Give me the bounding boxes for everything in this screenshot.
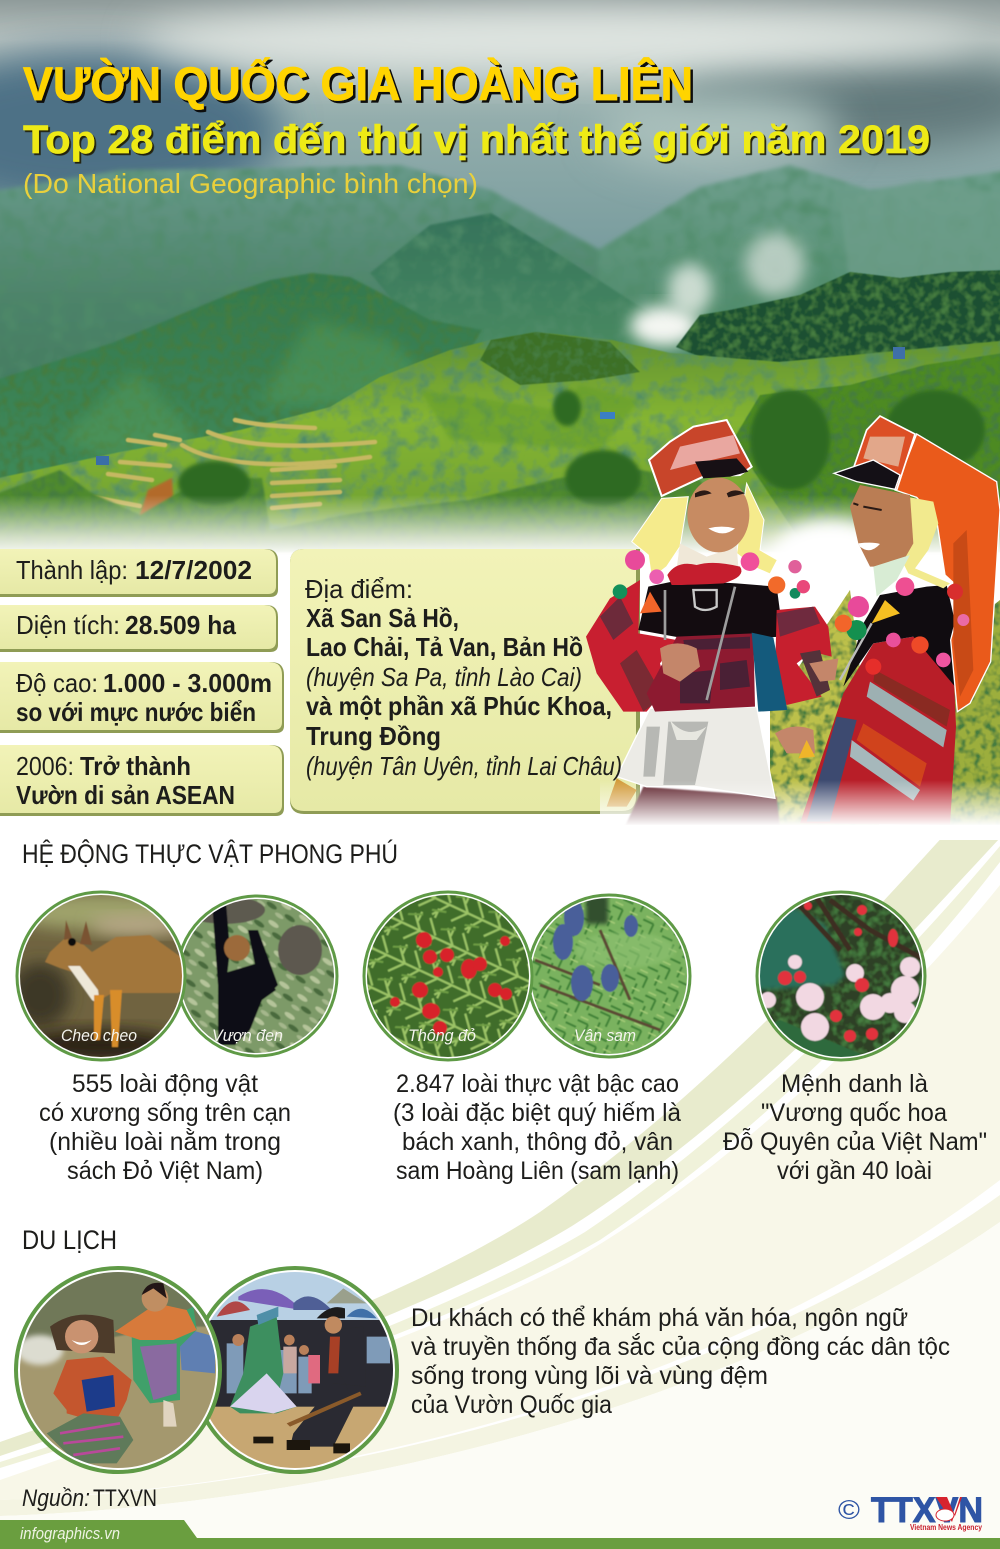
caption: rhododendron kingdom: Đỗ Quyên của Việt Nam"	[723, 1127, 987, 1156]
caption: animals: sách Đỏ Việt Nam)	[67, 1157, 263, 1185]
blue panel	[752, 633, 787, 712]
left sleeve	[586, 580, 677, 712]
tourism description: Du khách có thể khám phá văn hóa, ngôn ngữ	[411, 1304, 908, 1332]
bottom fade	[0, 495, 1000, 556]
left tree mass	[0, 470, 740, 552]
hero landscape photo	[0, 0, 1000, 556]
caption: rhododendron kingdom: với gần 40 loài	[777, 1157, 932, 1185]
caption: rhododendron kingdom	[723, 1070, 987, 1185]
tree clumps	[178, 390, 985, 506]
black blouse	[843, 585, 958, 687]
source	[22, 1485, 157, 1512]
TTXVN logo: Vietnam News Agency	[910, 1523, 982, 1532]
headdress	[649, 420, 752, 496]
info box: area: Diện tích:	[16, 610, 120, 640]
silver chain	[840, 623, 872, 680]
hood	[632, 483, 777, 578]
location text: (huyện Sa Pa, tỉnh Lào Cai)	[306, 662, 582, 692]
photo circle: gibbon: Vượn đen	[212, 1026, 283, 1045]
website: infographics.vn	[20, 1524, 120, 1543]
photo circle: gibbon	[181, 894, 338, 1058]
tassels	[607, 550, 810, 807]
face	[687, 478, 749, 552]
headdress	[854, 416, 915, 490]
photo circle: festival crowd	[190, 1268, 400, 1477]
source: Nguồn:	[22, 1485, 90, 1512]
caption: animals	[39, 1070, 291, 1185]
silver necklace	[693, 590, 717, 610]
silver pendants	[643, 722, 708, 785]
caption: plants	[393, 1070, 681, 1185]
photo circle: rhododendron	[756, 890, 928, 1062]
photo circle: fir cones	[530, 894, 692, 1058]
woman on the left	[586, 420, 838, 830]
location text: Xã San Sả Hồ,	[306, 603, 459, 633]
skirt and jacket	[800, 637, 956, 825]
background behind the two women	[640, 520, 1000, 840]
tourism description: của Vườn Quốc gia	[411, 1391, 612, 1419]
info box: location background	[290, 549, 640, 814]
white fade under the women	[600, 780, 1000, 837]
skirt	[623, 787, 780, 830]
photo circle: red yew	[362, 890, 534, 1062]
two women in ethnic costume	[586, 416, 1000, 830]
caption: animals: 555 loài động vật	[72, 1070, 258, 1098]
location text: Địa điểm:	[305, 574, 413, 604]
caption: plants: sam Hoàng Liên (sam lạnh)	[396, 1157, 679, 1185]
sky and clouds	[0, 0, 1000, 400]
caption: animals: có xương sống trên cạn	[39, 1099, 291, 1127]
white apron	[617, 707, 775, 798]
tourism description: và truyền thống đa sắc của cộng đồng các dân tộc	[411, 1332, 950, 1361]
info box: founding date: Thành lập:	[16, 555, 128, 585]
info box: ASEAN heritage: Vườn di sản ASEAN	[16, 780, 235, 810]
source of ranking: (Do National Geographic bình chọn)	[23, 168, 478, 199]
photo circle: mouse deer: Cheo cheo	[61, 1026, 137, 1045]
TTXVN logo: TTXVN	[871, 1491, 983, 1530]
info box: founding date: 12/7/2002	[135, 555, 252, 585]
info box: altitude: 1.000 - 3.000m	[103, 668, 272, 698]
caption: rhododendron kingdom: Mệnh danh là	[781, 1070, 928, 1098]
collar	[873, 555, 910, 597]
right sleeve	[775, 607, 832, 705]
info box: area	[0, 605, 278, 652]
right pine forest	[676, 270, 1000, 365]
caption: plants: bách xanh, thông đỏ, vân	[402, 1128, 673, 1156]
title: VƯỜN QUỐC GIA HOÀNG LIÊN	[23, 57, 693, 110]
tourism description	[411, 1304, 950, 1419]
TTXVN logo: ©	[838, 1495, 860, 1525]
photo circle: mouse deer	[10, 890, 190, 1062]
woman on the right	[775, 416, 1000, 825]
heading: tourism: DU LỊCH	[22, 1225, 117, 1255]
photo circle: fir cones: Vân sam	[574, 1026, 636, 1045]
info box: altitude	[0, 662, 284, 733]
body	[638, 580, 783, 640]
green forest mountain	[0, 273, 482, 490]
photo circle: red yew: Thông đỏ	[408, 1026, 476, 1045]
info box: altitude: Độ cao:	[16, 668, 98, 698]
heading: flora and fauna: HỆ ĐỘNG THỰC VẬT PHONG PHÚ	[22, 838, 398, 869]
info box: ASEAN heritage: 2006:	[16, 751, 74, 781]
location text: và một phần xã Phúc Khoa,	[306, 691, 612, 721]
dark central peak	[370, 213, 656, 360]
arm	[775, 727, 815, 753]
garland	[667, 563, 741, 585]
location text: Trung Đồng	[306, 721, 441, 751]
location text: (huyện Tân Uyên, tỉnh Lai Châu)	[306, 751, 622, 781]
info box: ASEAN heritage: Trở thành	[80, 751, 191, 781]
caption: rhododendron kingdom: "Vương quốc hoa	[761, 1099, 947, 1127]
hood	[900, 497, 950, 588]
caption: plants: (3 loài đặc biệt quý hiếm là	[393, 1099, 681, 1127]
source: TTXVN	[93, 1485, 157, 1512]
houses	[96, 347, 905, 465]
mist	[630, 233, 805, 346]
collar	[677, 543, 738, 568]
hands	[660, 643, 700, 682]
caption: animals: (nhiều loài nằm trong	[49, 1127, 281, 1156]
terraced hill	[0, 332, 1000, 552]
far mountains	[0, 165, 1000, 480]
info box: ASEAN heritage	[0, 745, 284, 816]
subtitle: Top 28 điểm đến thú vị nhất thế giới năm 2019	[23, 118, 930, 162]
red soil path	[130, 478, 176, 545]
tourism description: sống trong vùng lõi và vùng đệm	[411, 1362, 768, 1390]
info box: area: 28.509 ha	[125, 610, 237, 640]
caption: plants: 2.847 loài thực vật bậc cao	[396, 1070, 679, 1098]
green footer band	[0, 1520, 1000, 1549]
info box: founding date	[0, 549, 278, 597]
rice terraces	[92, 420, 375, 508]
location text	[305, 574, 622, 781]
location text: Lao Chải, Tả Van, Bản Hồ	[306, 632, 583, 662]
embroidered stripes	[867, 682, 947, 747]
right tree mass	[733, 352, 1000, 552]
info box: altitude: so với mực nước biển	[16, 697, 256, 727]
tassels	[798, 577, 969, 758]
face	[850, 485, 913, 567]
photo circle: children playing	[13, 1268, 223, 1477]
decorative swooshes	[0, 820, 1000, 1549]
orange scarf	[895, 434, 1000, 712]
embroidered waist	[647, 633, 755, 712]
